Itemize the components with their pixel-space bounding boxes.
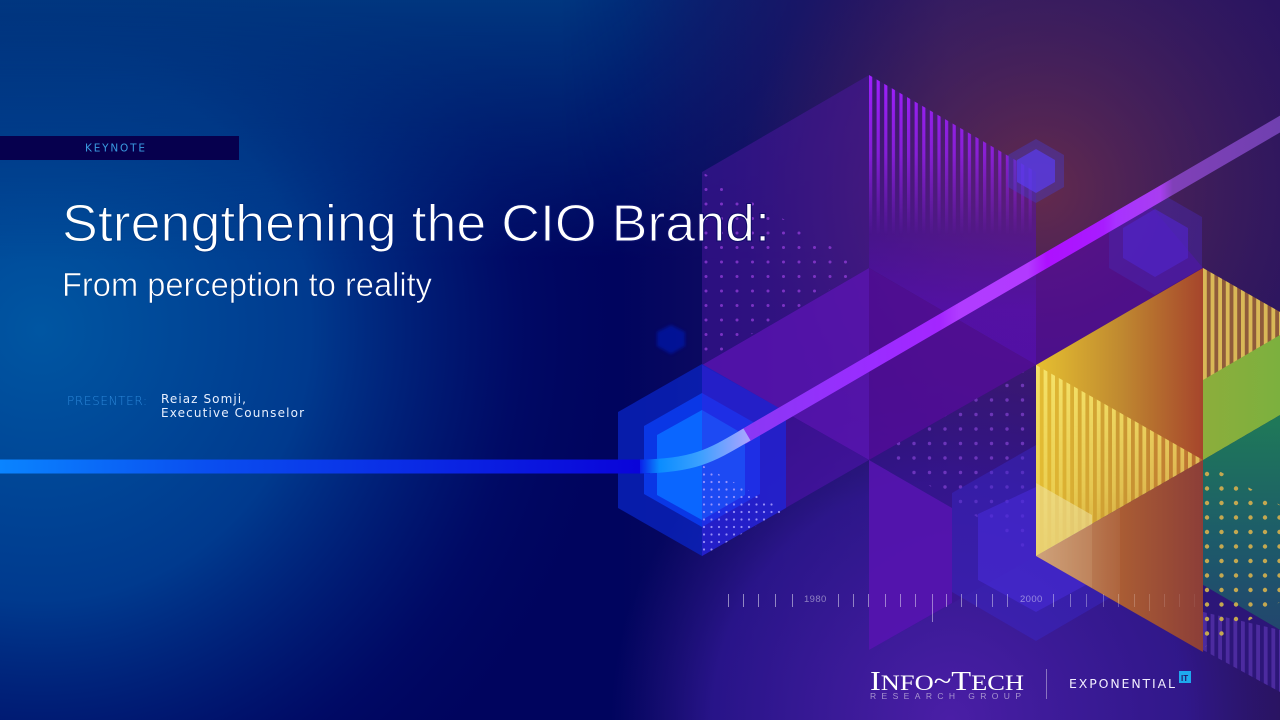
hexagon: right mid [1109,190,1202,295]
logo: Info-Tech Research Group: INFO ~T ECH [870,666,1024,696]
presenter name and role: Executive Counselor [161,406,304,420]
presenter label: PRESENTER: [67,394,147,408]
blue hexagon: lower middle [952,445,1120,641]
dot texture: blue hexagon [702,465,785,556]
colour cube: gold [1036,268,1203,652]
logo: Exponential IT [1069,671,1191,691]
subtitle: From perception to reality [62,266,432,303]
title: Strengthening the CIO Brand: [62,195,770,253]
small dark blue hexagon [657,325,685,354]
light beam [0,120,1280,466]
timeline label: 2000: 2000 [1020,594,1043,605]
presenter name and role [161,392,304,420]
keynote tag [0,136,239,160]
keynote tag: KEYNOTE [85,142,145,154]
presenter name and role: Reiaz Somji, [161,392,246,406]
timeline ticks [728,594,1194,622]
small hexagon: top right of upper cube [1008,139,1064,203]
timeline label: 1980: 1980 [804,594,827,605]
blue hexagon: large left [618,364,786,556]
colour cube: right side faces [1203,268,1280,692]
logo divider [1046,669,1047,699]
dot texture: central purple cube [880,365,1036,556]
decorative isometric cubes: purple [702,75,1203,650]
stripe texture: upper purple cube [869,75,1032,226]
logo: Exponential IT: IT [1181,674,1188,683]
logo: Info-Tech Research Group: RESEARCH GROUP [870,691,1021,701]
dot texture: upper left purple cube [702,172,868,362]
logo: Exponential IT: EXPONENTIAL [1069,676,1175,691]
